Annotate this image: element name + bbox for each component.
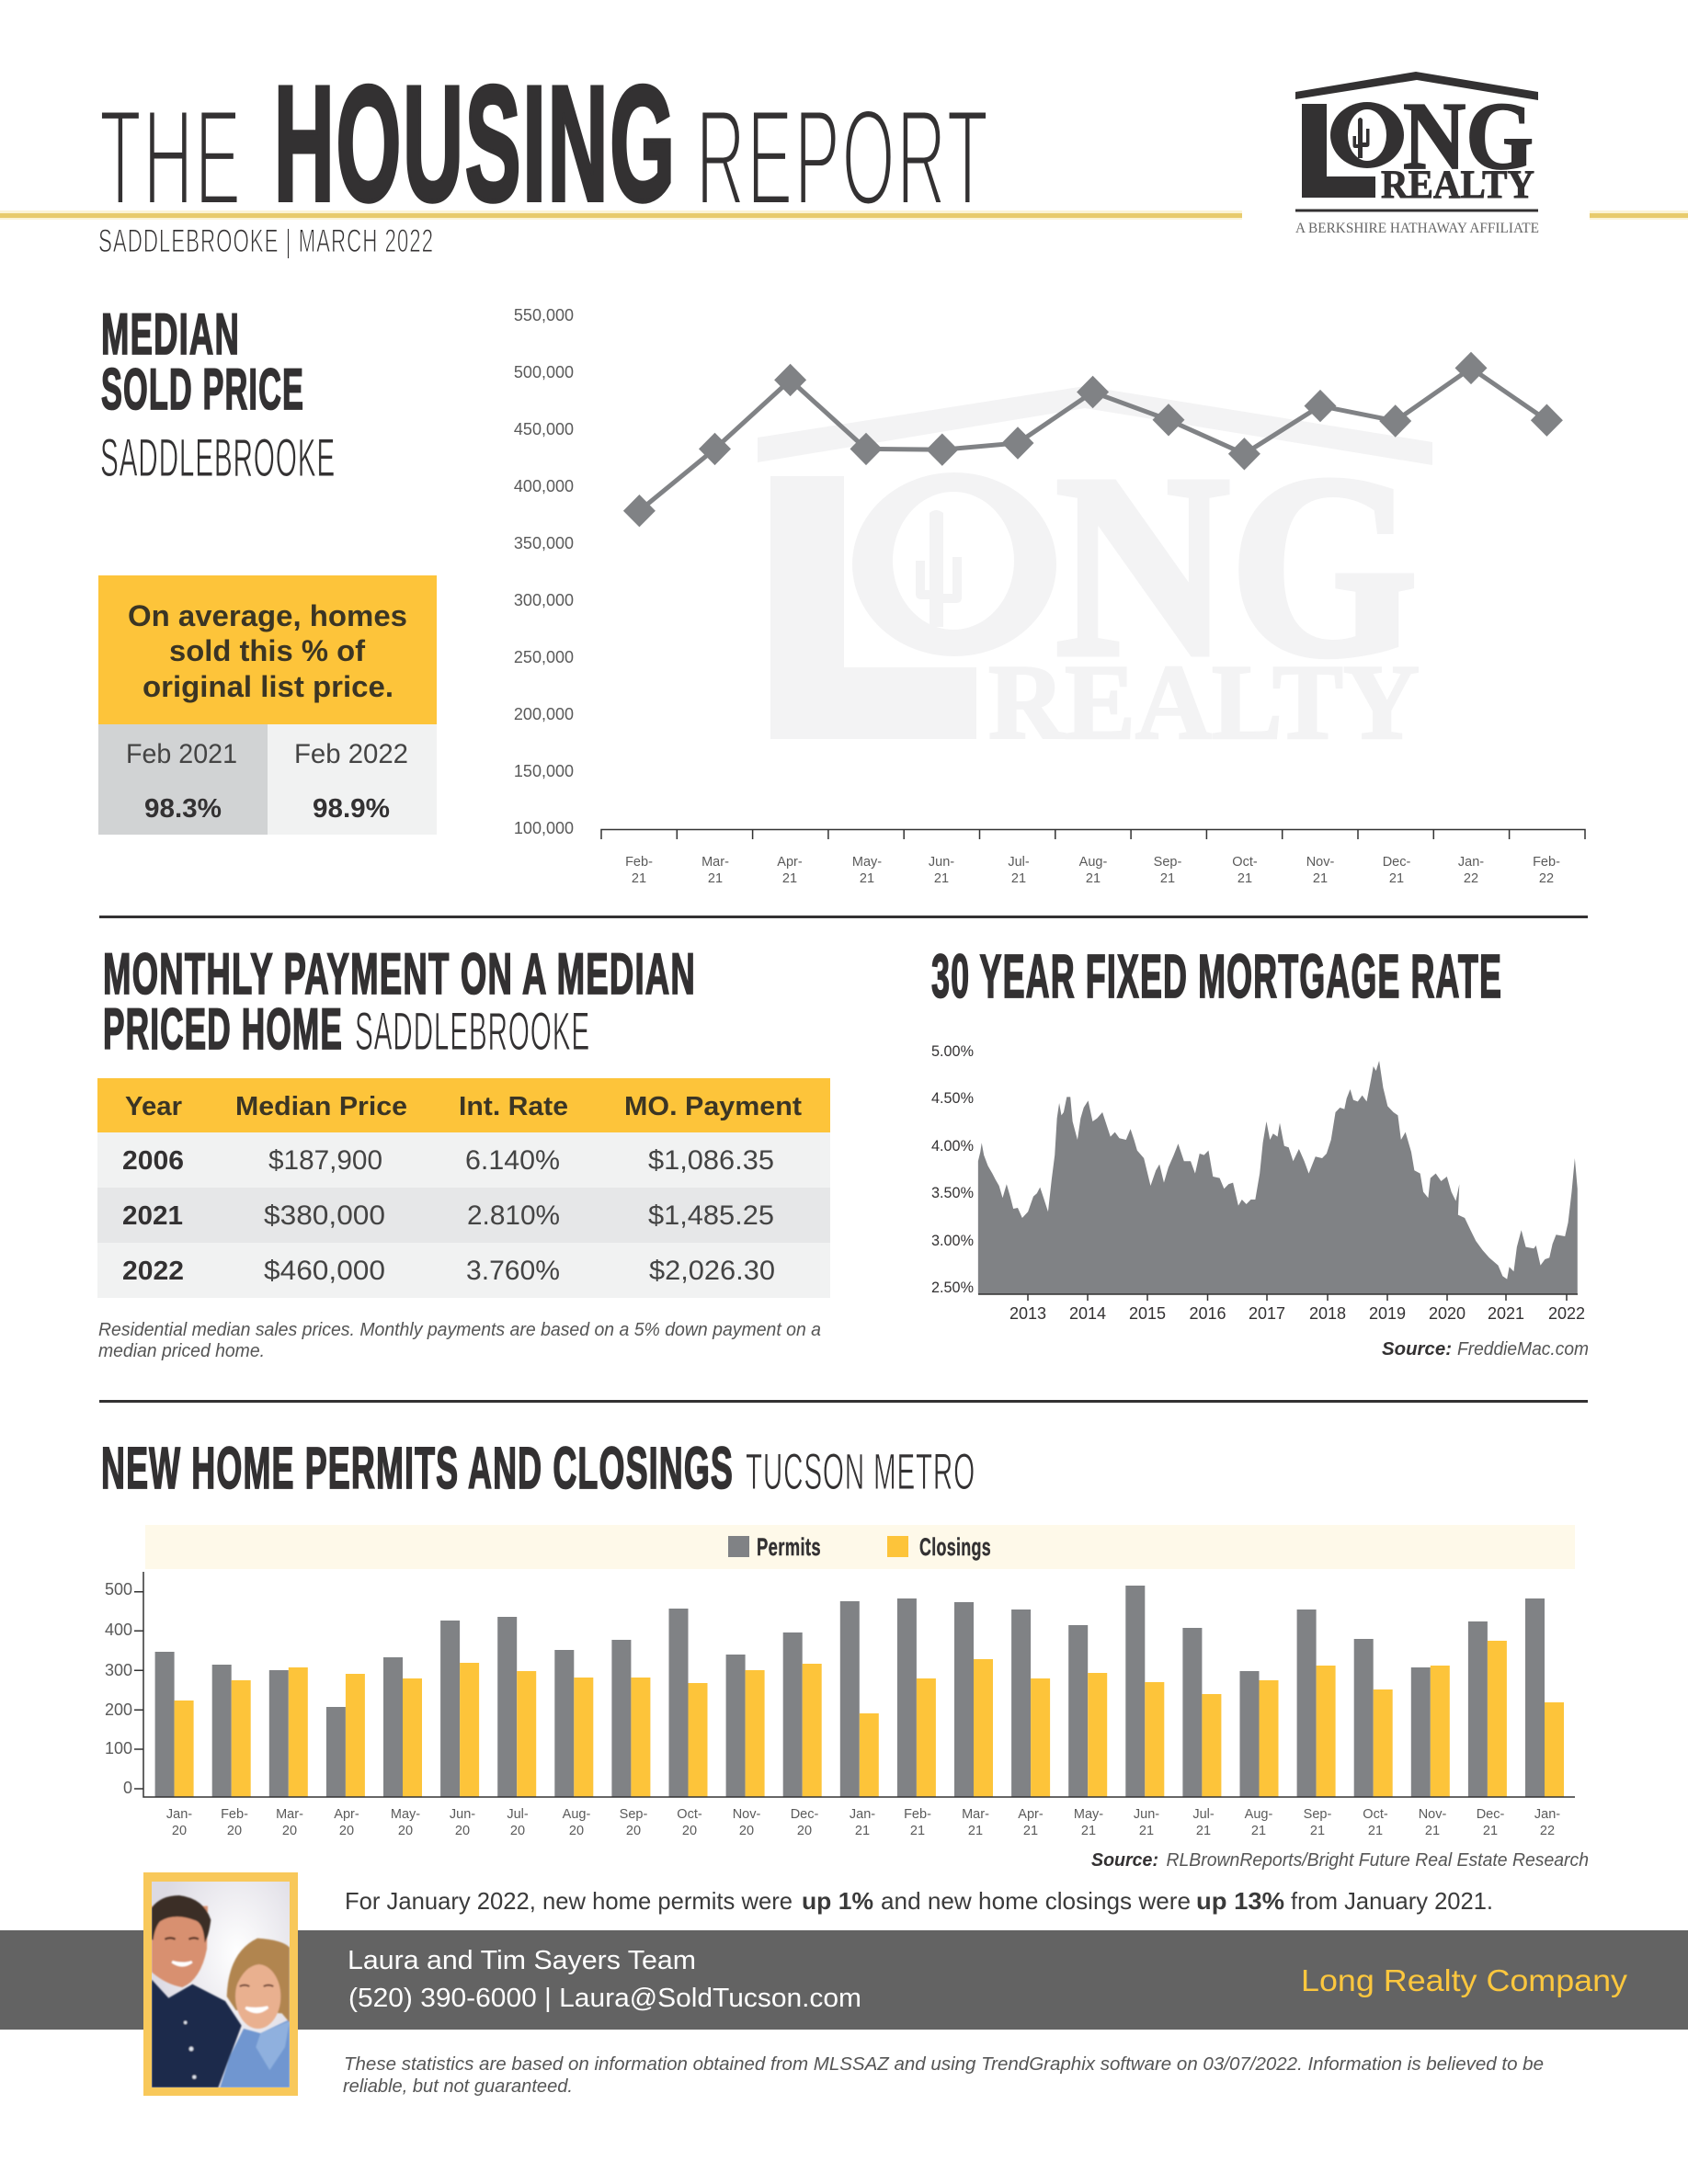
- table header: MO. Payment: [624, 1092, 802, 1121]
- x axis labels: 2015: [1129, 1304, 1166, 1323]
- y axis labels: 4.50%: [931, 1089, 974, 1107]
- x axis labels: Oct-: [677, 1807, 702, 1822]
- x axis labels: 22: [1539, 871, 1554, 886]
- row 2006: 2006: [122, 1146, 184, 1176]
- table header: Int. Rate: [459, 1092, 568, 1121]
- chart watermark: [758, 386, 1432, 762]
- x axis labels: Jun-: [450, 1807, 475, 1822]
- woman face: [235, 1964, 280, 2029]
- x axis labels: Jan-: [850, 1807, 875, 1822]
- x axis labels: Oct-: [1232, 855, 1258, 870]
- x axis labels: 21: [1389, 871, 1404, 886]
- x axis labels: Feb-: [221, 1807, 248, 1822]
- y axis labels: 400: [105, 1621, 132, 1639]
- cell: Feb 2022: 98.9%: [313, 794, 390, 824]
- cell: Feb 2021: 98.3%: [144, 794, 222, 824]
- x axis labels: 20: [398, 1824, 413, 1838]
- legend: [145, 1525, 1575, 1569]
- summary sentence: [345, 1887, 1493, 1915]
- y axis labels: 450,000: [514, 420, 574, 438]
- x axis labels: 21: [1237, 871, 1252, 886]
- man eyes: [165, 1938, 199, 1939]
- x axis labels: Feb-: [1533, 855, 1560, 870]
- callout text: sold this % of: [169, 634, 365, 667]
- x axis labels: May-: [1074, 1807, 1103, 1822]
- source: RL Brown: RLBrownReports/Bright Future Real Estate Research: [1166, 1850, 1589, 1871]
- y axis labels: 200: [105, 1701, 132, 1719]
- x axis labels: Dec-: [791, 1807, 818, 1822]
- y axis labels: 100,000: [514, 819, 574, 837]
- y axis labels: 0: [123, 1779, 132, 1797]
- x axis labels: Jul-: [507, 1807, 529, 1822]
- y axis labels: [514, 306, 574, 837]
- text: REPORT: [696, 81, 990, 233]
- baseline and ticks: [978, 1294, 1578, 1301]
- table: monthly payment: [97, 1078, 830, 1298]
- woman eyes: [240, 1985, 273, 1986]
- x axis labels: 22: [1540, 1824, 1555, 1838]
- source: Freddie Mac: [1382, 1339, 1589, 1359]
- chart watermark: NG: [1055, 422, 1418, 711]
- x axis labels: 20: [282, 1824, 297, 1838]
- legend: Permits: [757, 1533, 821, 1561]
- man shirt buttons: [184, 2021, 196, 2079]
- row 2022: $2,026.30: [649, 1256, 775, 1286]
- x axis labels: Dec-: [1477, 1807, 1504, 1822]
- x axis labels: Mar-: [962, 1807, 989, 1822]
- x axis labels: 21: [1251, 1824, 1266, 1838]
- y axis labels: 400,000: [514, 477, 574, 495]
- x axis labels: 22: [1464, 871, 1478, 886]
- table footnote: Residential median sales prices. Monthly payments are based on a 5% down payment on a: [98, 1320, 821, 1340]
- y axis labels: 350,000: [514, 534, 574, 552]
- contact details: (520) 390-6000 | Laura@SoldTucson.com: [348, 1984, 861, 2013]
- x axis labels: Jun-: [929, 855, 954, 870]
- x axis labels: [1009, 1304, 1585, 1323]
- x axis labels: 21: [1081, 1824, 1096, 1838]
- x axis labels: Jul-: [1192, 1807, 1215, 1822]
- x axis labels: 21: [1310, 1824, 1325, 1838]
- cell: Feb 2022: [268, 724, 437, 835]
- x axis labels: [625, 855, 1560, 886]
- y axis labels: 550,000: [514, 306, 574, 324]
- y axis labels: 250,000: [514, 648, 574, 666]
- x axis labels: 21: [1011, 871, 1026, 886]
- summary sentence: For January 2022, new home permits were: [345, 1887, 793, 1915]
- axes: [134, 1572, 1575, 1797]
- area chart: mortgage rate: [931, 1042, 1585, 1323]
- y axis labels: 500,000: [514, 363, 574, 381]
- y axis labels: 3.50%: [931, 1184, 974, 1201]
- y axis labels: 100: [105, 1739, 132, 1757]
- x axis labels: 2021: [1488, 1304, 1524, 1323]
- x axis labels: 20: [626, 1824, 641, 1838]
- x axis labels: 21: [860, 871, 874, 886]
- x axis labels: Mar-: [701, 855, 729, 870]
- heading: monthly payment: PRICED HOME: [103, 997, 343, 1062]
- x axis labels: 2018: [1309, 1304, 1346, 1323]
- y axis labels: 3.00%: [931, 1232, 974, 1249]
- company name: Long Realty Company: [1301, 1963, 1628, 1997]
- callout text: On average, homes: [128, 599, 407, 632]
- x axis labels: 20: [682, 1824, 697, 1838]
- x axis labels: 20: [510, 1824, 525, 1838]
- callout text: original list price.: [143, 670, 393, 703]
- row 2006: 6.140%: [465, 1145, 560, 1176]
- x axis labels: 21: [1086, 871, 1101, 886]
- x axis labels: Feb-: [904, 1807, 931, 1822]
- x axis labels: 2019: [1369, 1304, 1406, 1323]
- table header: Year: [125, 1092, 182, 1121]
- line chart: median sold price: [514, 306, 1585, 886]
- summary sentence: and new home closings were: [881, 1887, 1191, 1915]
- x axis: [601, 829, 1585, 839]
- x axis labels: 21: [1023, 1824, 1038, 1838]
- x axis labels: Oct-: [1363, 1807, 1388, 1822]
- row 2021: 2.810%: [467, 1200, 560, 1231]
- y axis labels: 2.50%: [931, 1279, 974, 1296]
- header rule: [0, 210, 1688, 220]
- man hair: [152, 1895, 211, 1943]
- logo: Long Realty: NG: [1403, 82, 1534, 189]
- table header: Median Price: [235, 1092, 407, 1121]
- x axis labels: Dec-: [1383, 855, 1410, 870]
- summary sentence: from January 2021.: [1291, 1887, 1493, 1915]
- x axis labels: Nov-: [1306, 855, 1334, 870]
- x axis labels: 21: [1425, 1824, 1440, 1838]
- x axis labels: Apr-: [1018, 1807, 1044, 1822]
- table footnote: median priced home.: [98, 1341, 265, 1361]
- disclaimer: These statistics are based on information obtained from MLSSAZ and using TrendGraphix software on 03/07/2022. Information is believed to be: [344, 2054, 1544, 2075]
- source: Freddie Mac: FreddieMac.com: [1457, 1339, 1589, 1359]
- row 2021: [122, 1200, 774, 1231]
- x axis labels: 21: [934, 871, 949, 886]
- x axis labels: 2013: [1009, 1304, 1046, 1323]
- subtitle: SADDLEBROOKE | MARCH 2022: [98, 223, 434, 259]
- heading: new home permits and closings: NEW HOME PERMITS AND CLOSINGS: [101, 1435, 734, 1501]
- x axis labels: May-: [391, 1807, 420, 1822]
- x axis labels: 20: [339, 1824, 354, 1838]
- permits bars: [155, 1586, 1545, 1797]
- y axis labels: 150,000: [514, 762, 574, 780]
- heading: new home permits and closings: TUCSON METRO: [746, 1442, 975, 1500]
- x axis labels: Apr-: [334, 1807, 359, 1822]
- heading: median sold price: SOLD PRICE: [101, 358, 304, 422]
- logo: Long Realty: REALTY: [1381, 164, 1534, 207]
- disclaimer: reliable, but not guaranteed.: [343, 2076, 573, 2097]
- x axis labels: 21: [782, 871, 797, 886]
- row 2021: $380,000: [264, 1200, 385, 1231]
- x axis labels: 21: [632, 871, 646, 886]
- woman hair: [227, 1939, 290, 2022]
- x axis labels: Sep-: [1154, 855, 1181, 870]
- team name: Laura and Tim Sayers Team: [348, 1946, 696, 1975]
- x axis labels: 20: [739, 1824, 754, 1838]
- x axis labels: 21: [708, 871, 723, 886]
- table header: [125, 1092, 802, 1121]
- x axis labels: 21: [855, 1824, 870, 1838]
- woman hair fringe: [235, 1957, 283, 1989]
- y axis labels: [931, 1042, 974, 1296]
- x axis labels: Sep-: [1304, 1807, 1331, 1822]
- photo: agents: [143, 1872, 298, 2096]
- y axis labels: [105, 1580, 132, 1797]
- woman smile: [245, 2008, 268, 2012]
- row 2021: $1,485.25: [648, 1200, 774, 1231]
- x axis labels: Nov-: [733, 1807, 760, 1822]
- x axis labels: 2020: [1429, 1304, 1466, 1323]
- y axis labels: 4.00%: [931, 1137, 974, 1155]
- x axis labels: 2016: [1189, 1304, 1226, 1323]
- row 2022: $460,000: [264, 1256, 385, 1286]
- heading: median sold price: SADDLEBROOKE: [100, 428, 336, 488]
- x axis labels: Jan-: [166, 1807, 192, 1822]
- row 2021: 2021: [122, 1201, 183, 1231]
- x axis labels: 2017: [1249, 1304, 1285, 1323]
- heading: monthly payment: MONTHLY PAYMENT ON A MEDIAN: [103, 942, 696, 1007]
- x axis labels: Nov-: [1419, 1807, 1446, 1822]
- x axis labels: Jun-: [1134, 1807, 1159, 1822]
- cell: Feb 2021: [98, 724, 268, 835]
- x axis labels: 20: [797, 1824, 812, 1838]
- legend: Closings: [919, 1533, 991, 1561]
- x axis labels: Mar-: [276, 1807, 303, 1822]
- x axis labels: Apr-: [777, 855, 803, 870]
- y axis labels: 300: [105, 1661, 132, 1679]
- x axis labels: Jan-: [1458, 855, 1484, 870]
- x axis labels: May-: [852, 855, 882, 870]
- x axis labels: Feb-: [625, 855, 653, 870]
- rate area: [978, 1061, 1578, 1294]
- title: THE: [99, 81, 243, 233]
- x axis labels: 21: [1368, 1824, 1383, 1838]
- y axis labels: 5.00%: [931, 1042, 974, 1060]
- source: RL Brown: Source:: [1091, 1850, 1158, 1871]
- cell: Feb 2021: Feb 2021: [126, 739, 237, 769]
- logo: Long Realty: A BERKSHIRE HATHAWAY AFFILIATE: [1295, 221, 1539, 236]
- x axis labels: 21: [910, 1824, 925, 1838]
- man neck and face: [152, 1906, 208, 1987]
- row 2022: 2022: [122, 1257, 184, 1286]
- x axis labels: 21: [1313, 871, 1328, 886]
- row 2006: $1,086.35: [648, 1145, 774, 1176]
- summary sentence: up 1%: [802, 1887, 873, 1915]
- disclaimer: [343, 2054, 1544, 2097]
- man smile: [172, 1962, 192, 1965]
- table footnote: [98, 1320, 821, 1361]
- callout text: [128, 599, 407, 703]
- x axis labels: Sep-: [620, 1807, 647, 1822]
- source: Freddie Mac: Source:: [1382, 1339, 1452, 1359]
- row 2006: $187,900: [268, 1145, 382, 1176]
- x axis labels: 20: [569, 1824, 584, 1838]
- row 2022: [122, 1256, 775, 1286]
- data markers: [623, 352, 1563, 527]
- x axis labels: 21: [968, 1824, 983, 1838]
- y axis labels: 200,000: [514, 705, 574, 723]
- man shirt: [152, 1980, 242, 2087]
- x axis labels: 21: [1196, 1824, 1211, 1838]
- bar chart: permits and closings: [105, 1525, 1575, 1838]
- x axis labels: 20: [455, 1824, 470, 1838]
- x axis labels: 20: [172, 1824, 187, 1838]
- heading: monthly payment: [103, 942, 696, 1062]
- closings bars: [175, 1641, 1564, 1797]
- x axis labels: 2014: [1069, 1304, 1106, 1323]
- panel: list price percentage: [98, 575, 437, 835]
- cell: Feb 2022: Feb 2022: [294, 739, 408, 769]
- chart watermark: REALTY: [988, 643, 1420, 762]
- contact band: [0, 1930, 1688, 2030]
- heading: monthly payment: SADDLEBROOKE: [355, 1002, 590, 1062]
- heading: median sold price: [100, 302, 336, 488]
- x axis labels: Aug-: [563, 1807, 590, 1822]
- row 2006: [122, 1145, 774, 1176]
- x axis labels: Jul-: [1008, 855, 1030, 870]
- title: HOUSING: [274, 51, 677, 235]
- x axis labels: 21: [1139, 1824, 1154, 1838]
- summary sentence: up 13%: [1196, 1887, 1284, 1915]
- x axis labels: Jan-: [1534, 1807, 1560, 1822]
- woman shirt: [220, 2019, 290, 2087]
- x axis labels: 2022: [1548, 1304, 1585, 1323]
- row 2022: 3.760%: [466, 1256, 560, 1286]
- heading: median sold price: MEDIAN: [101, 302, 240, 367]
- data line: [639, 368, 1546, 511]
- y axis labels: 500: [105, 1580, 132, 1598]
- logo: Long Realty: [1295, 72, 1539, 236]
- x axis labels: [166, 1807, 1560, 1838]
- x axis labels: Aug-: [1245, 1807, 1272, 1822]
- x axis labels: 21: [1160, 871, 1175, 886]
- x axis labels: Aug-: [1079, 855, 1107, 870]
- x axis labels: 21: [1483, 1824, 1498, 1838]
- y axis labels: 300,000: [514, 591, 574, 609]
- x axis labels: 20: [227, 1824, 242, 1838]
